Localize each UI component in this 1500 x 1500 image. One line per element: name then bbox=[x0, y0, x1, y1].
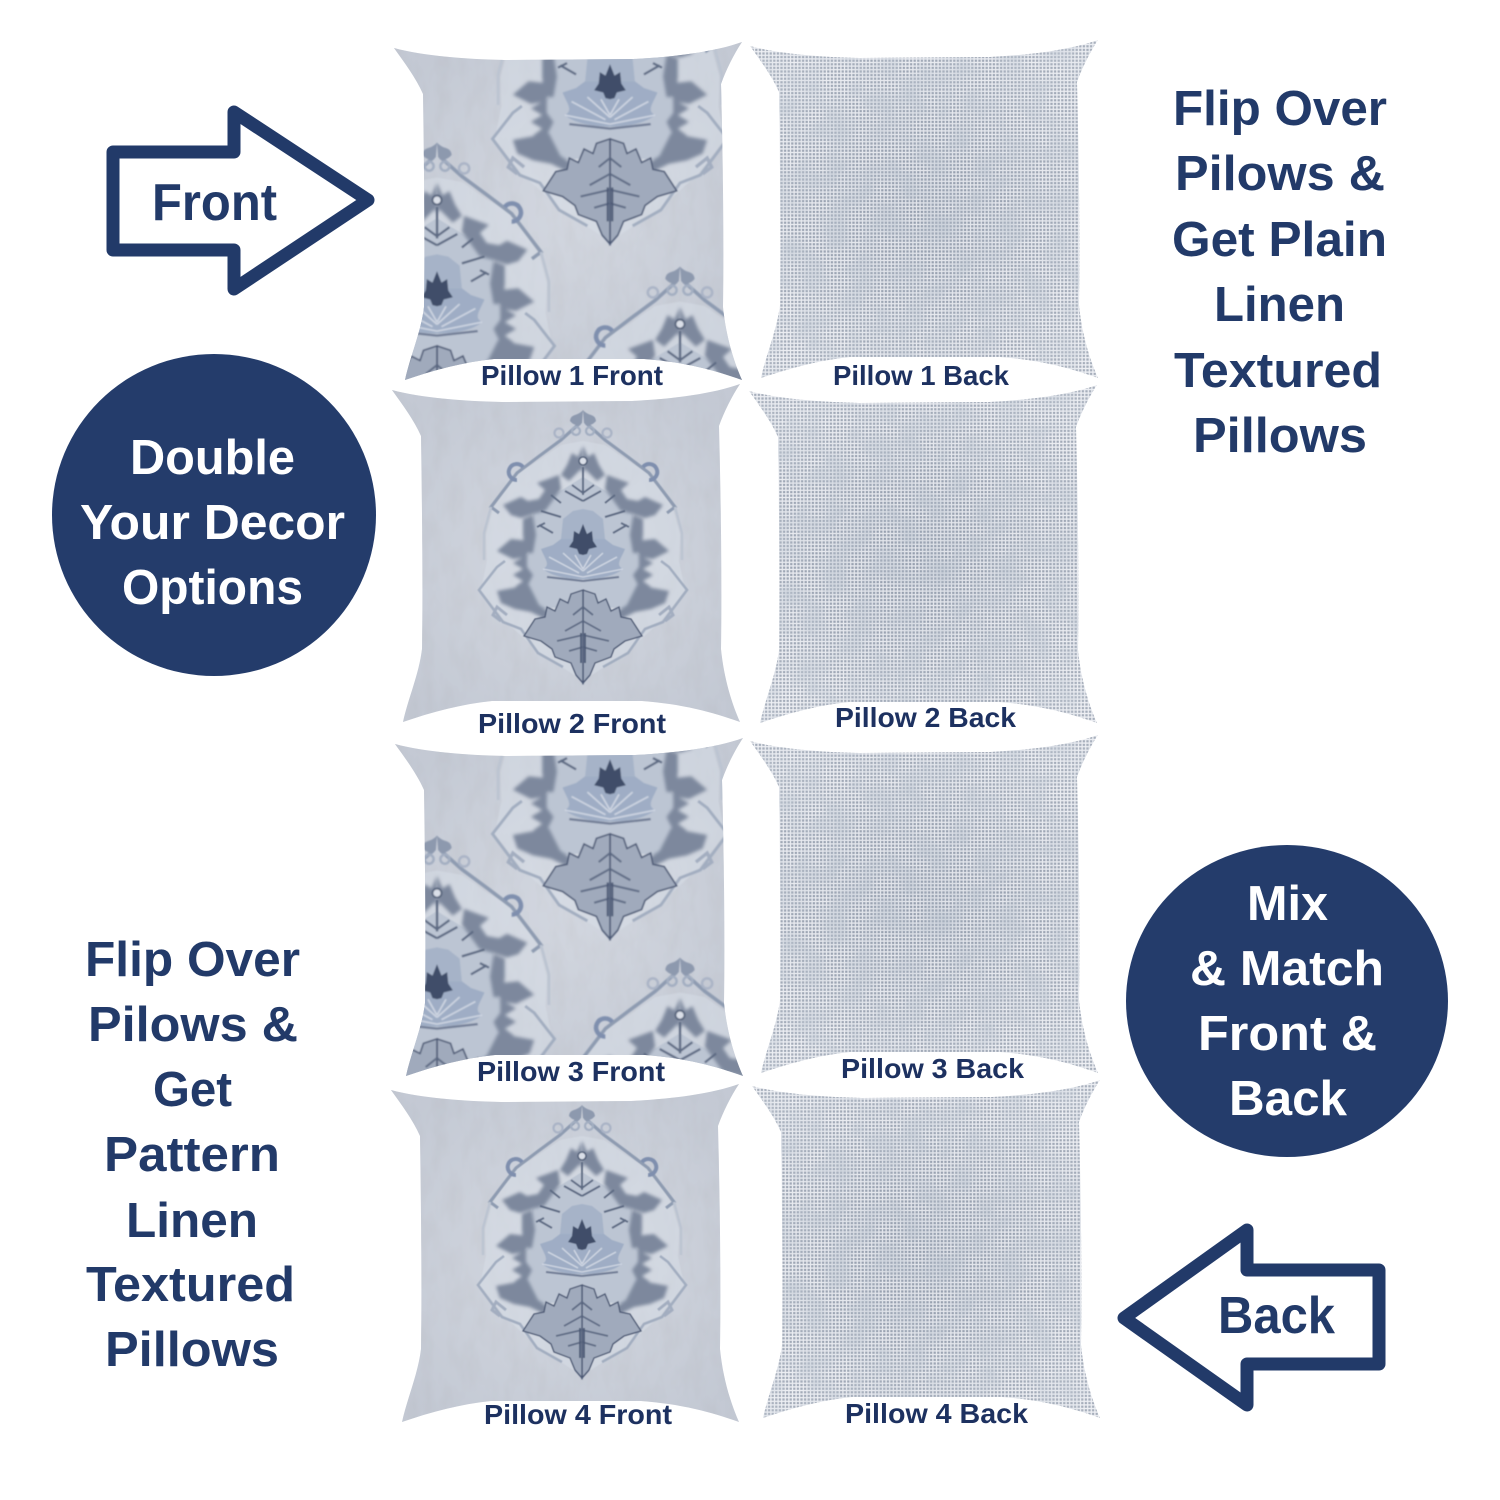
pillow 2 front bbox=[392, 384, 744, 724]
callout circle: mix and match front and back: Back bbox=[1229, 1072, 1348, 1126]
text block: flip over for plain linen bbox=[1172, 82, 1387, 463]
text block: flip over for pattern linen: Pillows bbox=[105, 1323, 279, 1377]
label: pillow 1 back: Pillow 1 Back bbox=[833, 360, 1009, 391]
text block: flip over for plain linen: Textured bbox=[1174, 344, 1382, 398]
pillow 3 front bbox=[395, 738, 743, 1076]
callout circle: mix and match front and back: & Match bbox=[1190, 942, 1384, 996]
pillow 1 front bbox=[394, 42, 742, 380]
text block: flip over for plain linen: Get Plain bbox=[1172, 213, 1387, 267]
pillow 2 back bbox=[749, 385, 1099, 725]
pillow 4 back bbox=[752, 1080, 1102, 1420]
label: pillow 2 back: Pillow 2 Back bbox=[835, 702, 1016, 733]
text block: flip over for pattern linen: Pattern bbox=[104, 1128, 280, 1182]
label: pillow 4 back: Pillow 4 Back bbox=[845, 1398, 1028, 1429]
text block: flip over for plain linen: Flip Over bbox=[1173, 82, 1387, 136]
callout circle: double your decor options: Your Decor bbox=[80, 496, 345, 550]
arrow: front bbox=[113, 112, 368, 289]
callout circle: mix and match front and back bbox=[1126, 845, 1448, 1157]
arrow: back: Back bbox=[1218, 1287, 1335, 1345]
text block: flip over for plain linen: Pillows bbox=[1193, 409, 1367, 463]
label: pillow 3 front: Pillow 3 Front bbox=[477, 1056, 665, 1087]
pillow 3 back bbox=[750, 735, 1100, 1075]
text block: flip over for pattern linen: Flip Over bbox=[85, 933, 300, 987]
label: pillow 3 back: Pillow 3 Back bbox=[841, 1053, 1024, 1084]
text block: flip over for pattern linen: Textured bbox=[86, 1258, 295, 1312]
text block: flip over for pattern linen: Pilows & bbox=[88, 998, 298, 1052]
text block: flip over for pattern linen: Linen bbox=[126, 1194, 258, 1248]
text block: flip over for pattern linen bbox=[85, 933, 300, 1377]
label: pillow 2 front: Pillow 2 Front bbox=[478, 708, 666, 739]
pillow 1 back bbox=[750, 40, 1100, 380]
arrow: front: Front bbox=[152, 174, 277, 232]
text block: flip over for plain linen: Pilows & bbox=[1175, 147, 1385, 201]
callout circle: mix and match front and back: Front & bbox=[1198, 1007, 1377, 1061]
callout circle: double your decor options: Double bbox=[130, 431, 295, 485]
text block: flip over for plain linen: Linen bbox=[1214, 278, 1345, 332]
callout circle: mix and match front and back: Mix bbox=[1247, 877, 1328, 931]
callout circle: double your decor options bbox=[52, 354, 376, 676]
callout circle: double your decor options: Options bbox=[122, 561, 303, 615]
text block: flip over for pattern linen: Get bbox=[153, 1063, 232, 1117]
pillow 4 front bbox=[391, 1084, 741, 1424]
arrow: back bbox=[1124, 1230, 1379, 1405]
label: pillow 1 front: Pillow 1 Front bbox=[481, 360, 663, 391]
label: pillow 4 front: Pillow 4 Front bbox=[484, 1399, 672, 1430]
